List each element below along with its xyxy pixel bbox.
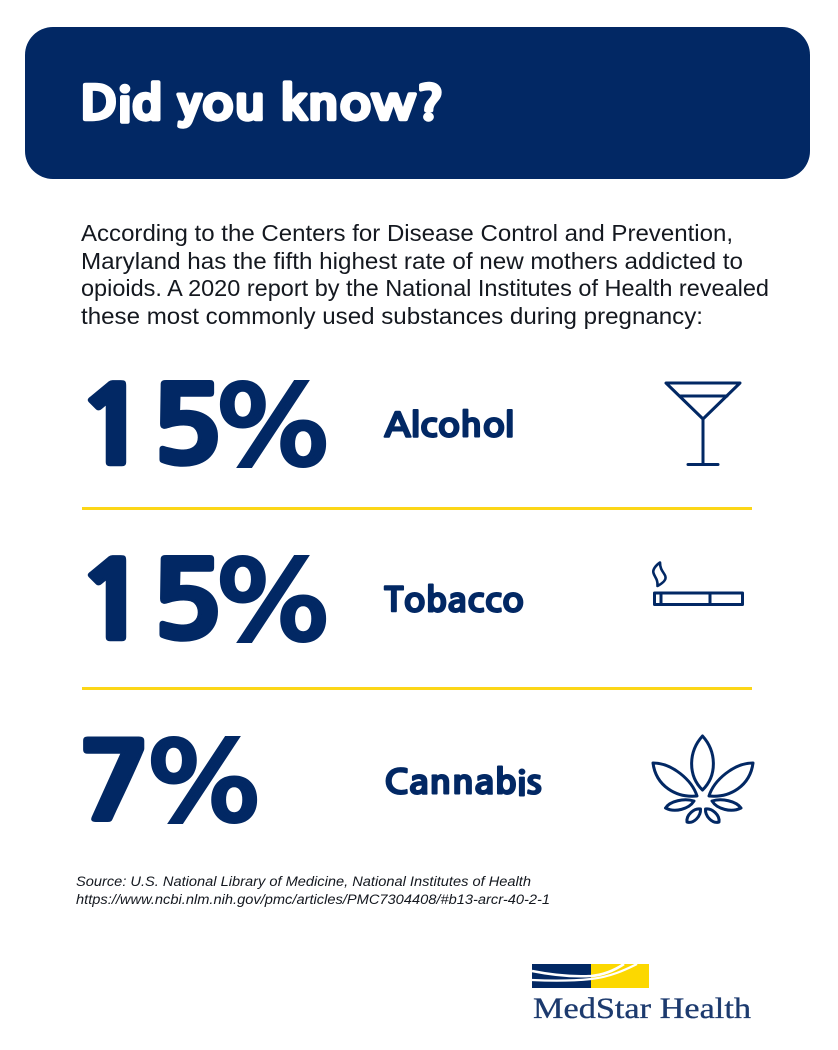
intro text: Maryland has the fifth highest rate of new mothers addicted to <box>81 248 743 274</box>
row: alcohol <box>77 362 740 490</box>
stat: tobacco 15%: % <box>216 537 330 665</box>
logo: MedStar Health <box>532 964 751 1025</box>
icon: martini glass <box>666 383 740 464</box>
intro text: opioids. A 2020 report by the National Institutes of Health revealed <box>81 275 769 301</box>
stat: alcohol 15%: 15 <box>77 374 223 480</box>
divider <box>82 687 752 690</box>
stat: alcohol 15% <box>77 362 330 490</box>
source note: Source: U.S. National Library of Medicine, National Institutes of Health <box>76 874 531 889</box>
label: alcohol: Alcohol <box>383 408 514 442</box>
label: cannabis: Cannabis <box>384 765 542 799</box>
row: cannabis <box>78 718 753 846</box>
header banner <box>25 27 810 179</box>
divider <box>82 507 752 510</box>
stat: alcohol 15%: % <box>216 362 330 490</box>
stat: tobacco 15% <box>77 537 330 665</box>
label: tobacco: Tobacco <box>384 583 524 617</box>
logo wordmark: MedStar Health <box>533 992 751 1025</box>
intro text <box>81 220 769 329</box>
stat: tobacco 15%: 15 <box>77 549 223 655</box>
intro text: these most commonly used substances during pregnancy: <box>81 303 703 329</box>
logo mark <box>532 964 649 988</box>
icon: cannabis leaf <box>653 736 753 822</box>
stat: cannabis 7% <box>78 718 261 846</box>
source note <box>76 874 550 907</box>
source note: https://www.ncbi.nlm.nih.gov/pmc/articles/PMC7304408/#b13-arcr-40-2-1 <box>76 892 550 907</box>
row: tobacco <box>77 537 742 665</box>
intro text: According to the Centers for Disease Control and Prevention, <box>81 220 733 246</box>
stat: cannabis 7%: % <box>147 718 261 846</box>
icon: cigarette <box>653 562 742 604</box>
title: Did you know? <box>80 80 445 127</box>
stat: cannabis 7%: 7 <box>78 730 151 836</box>
